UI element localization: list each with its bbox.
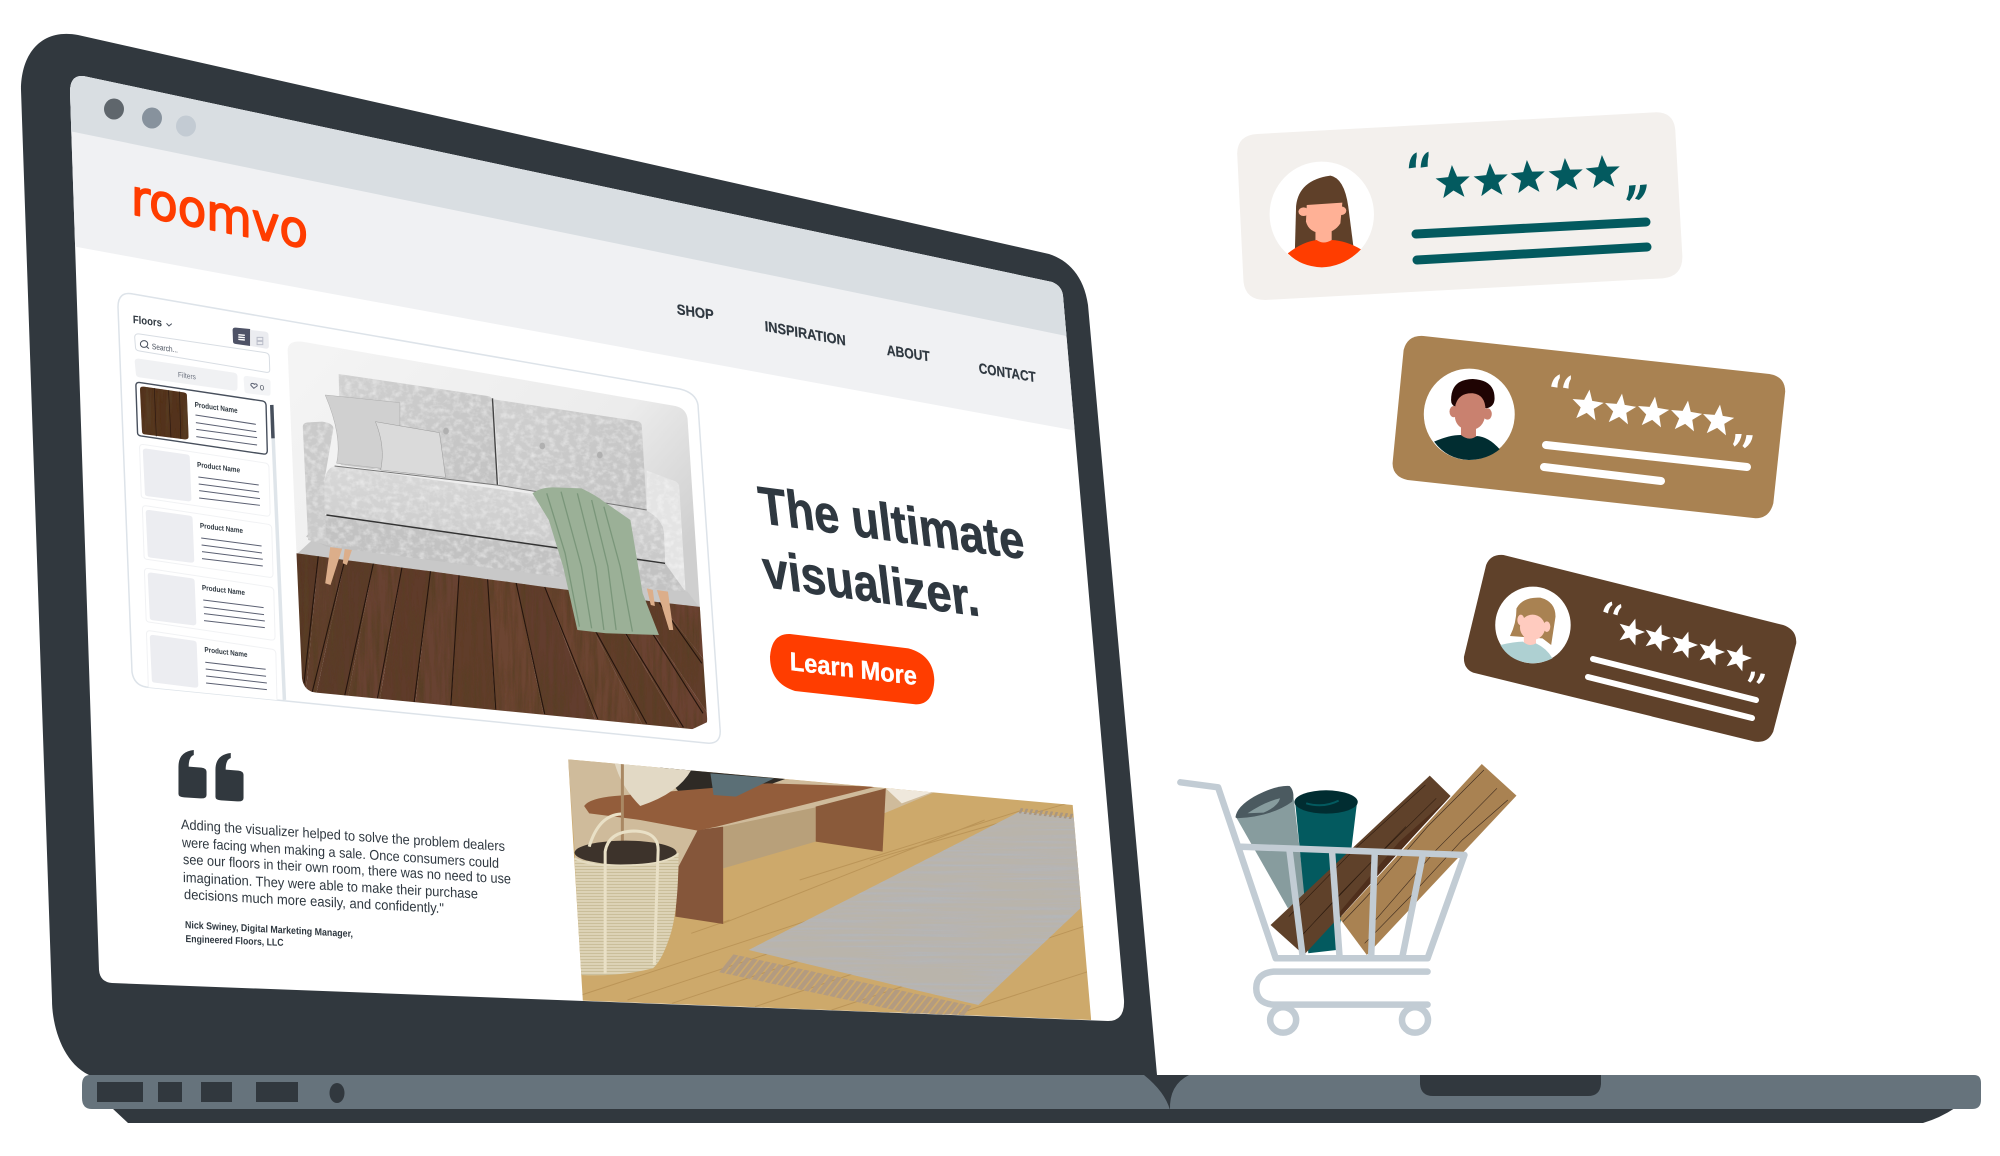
cream pillow bbox=[615, 763, 691, 806]
testimonial text: Adding the visualizer helped to solve the problem dealers bbox=[181, 816, 505, 854]
bench left leg bbox=[675, 827, 723, 924]
card 4 outline bbox=[144, 568, 275, 640]
cushion seam bbox=[492, 398, 497, 485]
cart basket frame bbox=[1180, 782, 1464, 958]
wood floor bbox=[564, 757, 1099, 1023]
favourites button bbox=[244, 376, 271, 396]
stars and quote marks bbox=[1409, 152, 1647, 201]
avatar: man with curly hair bbox=[1424, 369, 1515, 460]
card 2 thumbnail bbox=[143, 449, 191, 501]
base hinge notch bbox=[1144, 1075, 1189, 1110]
cushion buttons bbox=[443, 428, 603, 458]
bench right leg bbox=[816, 788, 886, 852]
basket bbox=[575, 814, 679, 975]
caret bbox=[167, 323, 172, 326]
review card 3 background bbox=[1464, 555, 1796, 742]
nav: contact: CONTACT bbox=[978, 361, 1036, 386]
view toggle: list bbox=[233, 328, 250, 346]
teal carpet roll bbox=[1294, 790, 1358, 953]
review card 2 background bbox=[1393, 336, 1785, 518]
heart icon bbox=[251, 383, 257, 388]
card 1 lines bbox=[195, 415, 257, 445]
cart chassis and wheels bbox=[1256, 972, 1428, 1033]
review card 2 bbox=[1393, 336, 1785, 518]
product name 4: Product Name bbox=[202, 583, 245, 597]
pillow shadow bbox=[659, 767, 787, 797]
green blanket bbox=[532, 487, 659, 635]
plant stem bbox=[621, 763, 624, 847]
button shape bbox=[770, 634, 934, 704]
pillow 1 bbox=[325, 395, 400, 468]
card 2 lines bbox=[198, 477, 260, 505]
blue pillow bbox=[710, 773, 774, 797]
search icon bbox=[140, 341, 149, 349]
shopping cart with flooring bbox=[1180, 764, 1516, 1033]
stars and quote marks bbox=[1603, 602, 1765, 684]
testimonial text: decisions much more easily, and confidently." bbox=[184, 886, 444, 916]
basket body bbox=[575, 853, 679, 975]
attribution: Nick Swiney, Digital Marketing Manager, bbox=[185, 920, 353, 940]
product name 3: Product Name bbox=[200, 521, 243, 535]
product name 5: Product Name bbox=[204, 645, 248, 659]
rug bbox=[749, 812, 1080, 1005]
title bbox=[755, 476, 1027, 628]
testimonial text: see our floors in their own room, there was no need to use bbox=[183, 851, 511, 887]
wall bbox=[568, 759, 934, 877]
review lines bbox=[1544, 445, 1747, 481]
window strip bbox=[886, 788, 934, 803]
browser and nav bands bbox=[70, 76, 1075, 430]
card 3 bbox=[142, 506, 273, 577]
testimonial text: imagination. They were able to make their purchase bbox=[183, 869, 478, 902]
sofa bbox=[303, 374, 685, 635]
right arm bbox=[647, 471, 685, 590]
review card 3 bbox=[1464, 555, 1796, 742]
laptop base lower shadow bbox=[112, 1108, 1955, 1123]
button label: Learn More bbox=[790, 646, 917, 691]
avatar: woman with long hair bbox=[1270, 162, 1374, 267]
grid icon bbox=[257, 337, 263, 345]
sofa shadow bbox=[296, 540, 704, 613]
left arm bbox=[303, 422, 333, 545]
laptop screen bbox=[50, 40, 1124, 1023]
trackpad notch bbox=[1420, 1075, 1601, 1096]
button: learn more bbox=[770, 634, 934, 704]
navigation bbox=[676, 302, 1036, 386]
wall bbox=[280, 337, 712, 637]
rug fringe bbox=[726, 963, 966, 1015]
sofa upholstery bbox=[303, 374, 685, 592]
search box bbox=[135, 334, 270, 372]
product name 1: Product Name bbox=[194, 400, 238, 415]
grey carpet roll bbox=[1235, 786, 1305, 908]
avatar: woman with wavy hair bbox=[1495, 587, 1571, 663]
card 5 lines bbox=[205, 662, 267, 690]
view toggle: grid bbox=[251, 330, 269, 349]
card 5 bbox=[146, 630, 278, 700]
laptop lid bbox=[21, 34, 1157, 1075]
nav: inspiration: INSPIRATION bbox=[764, 319, 846, 350]
sofa legs bbox=[325, 545, 673, 630]
sidebar title: floors: Floors bbox=[133, 314, 162, 329]
icon: quotation mark bbox=[178, 750, 244, 801]
card 1 wood thumbnail bbox=[140, 387, 189, 439]
panel: visualizer bbox=[118, 294, 720, 743]
floor seams bbox=[304, 556, 703, 727]
card 3 outline bbox=[142, 506, 273, 577]
back cushion left bbox=[339, 374, 497, 485]
card 4 thumbnail bbox=[148, 573, 196, 625]
card 3 lines bbox=[201, 538, 263, 566]
logo: roomvo: roomvo bbox=[131, 167, 308, 261]
floor boards bbox=[576, 803, 1093, 1013]
card 5 outline bbox=[146, 630, 278, 700]
card 1 selected bbox=[136, 382, 267, 454]
review card 1 bbox=[1237, 112, 1682, 300]
basket handles bbox=[589, 814, 658, 973]
card 4 lines bbox=[203, 600, 265, 628]
browser dots bbox=[104, 98, 196, 136]
dark wood plank bbox=[1271, 776, 1451, 955]
testimonial text bbox=[181, 816, 511, 916]
card 4 bbox=[144, 568, 275, 640]
scroll track bbox=[272, 405, 284, 700]
room photo: rug, bench and basket bbox=[564, 757, 1099, 1023]
card 1 outline bbox=[136, 382, 267, 454]
front rail bbox=[306, 515, 685, 592]
card 3 thumbnail bbox=[146, 510, 194, 563]
blanket folds bbox=[547, 492, 632, 632]
nav: shop: SHOP bbox=[676, 302, 714, 324]
list icon lines bbox=[238, 335, 245, 340]
wood floor planks bbox=[288, 553, 712, 733]
stars and quote marks bbox=[1551, 374, 1753, 448]
filters label: Filters bbox=[178, 370, 196, 382]
seat line bbox=[326, 515, 665, 563]
panel outline bbox=[118, 294, 720, 743]
product names bbox=[194, 400, 248, 659]
title line 1: The ultimate bbox=[755, 476, 1027, 571]
testimonial text: were facing when making a sale. Once consumers could bbox=[181, 834, 499, 871]
card 5 thumbnail bbox=[150, 635, 198, 688]
card 2 outline bbox=[140, 444, 270, 516]
bench top bbox=[584, 783, 876, 831]
filters button bbox=[135, 359, 237, 391]
nav: about: ABOUT bbox=[886, 343, 930, 365]
screen background bbox=[70, 76, 1124, 1021]
product name 2: Product Name bbox=[197, 460, 240, 475]
review card 1 background bbox=[1237, 112, 1682, 300]
seat top shadow bbox=[335, 466, 647, 510]
basket soil bbox=[575, 841, 677, 865]
light wood plank bbox=[1340, 764, 1516, 955]
laptop base deck bbox=[82, 1075, 1981, 1109]
pillow 2 bbox=[375, 422, 446, 477]
search placeholder: Search... bbox=[152, 342, 178, 355]
attribution bbox=[185, 920, 353, 949]
favourite count: 0 bbox=[260, 383, 264, 392]
testimonial bbox=[178, 750, 511, 949]
top fringe bbox=[1020, 811, 1074, 817]
card 2 bbox=[140, 444, 270, 516]
review lines bbox=[1416, 222, 1647, 260]
basket rim bbox=[575, 853, 679, 866]
back cushion right bbox=[494, 399, 647, 510]
bench shadow underside bbox=[723, 807, 816, 868]
review lines bbox=[1588, 659, 1756, 718]
sidebar shapes bbox=[135, 323, 284, 715]
laptop ports bbox=[97, 1082, 344, 1103]
scroll thumb bbox=[272, 405, 273, 438]
room visualizer image: sofa on wood floor bbox=[280, 337, 712, 733]
title line 2: visualizer. bbox=[759, 540, 982, 628]
attribution: Engineered Floors, LLC bbox=[186, 934, 284, 949]
seat cushion bbox=[324, 466, 665, 563]
